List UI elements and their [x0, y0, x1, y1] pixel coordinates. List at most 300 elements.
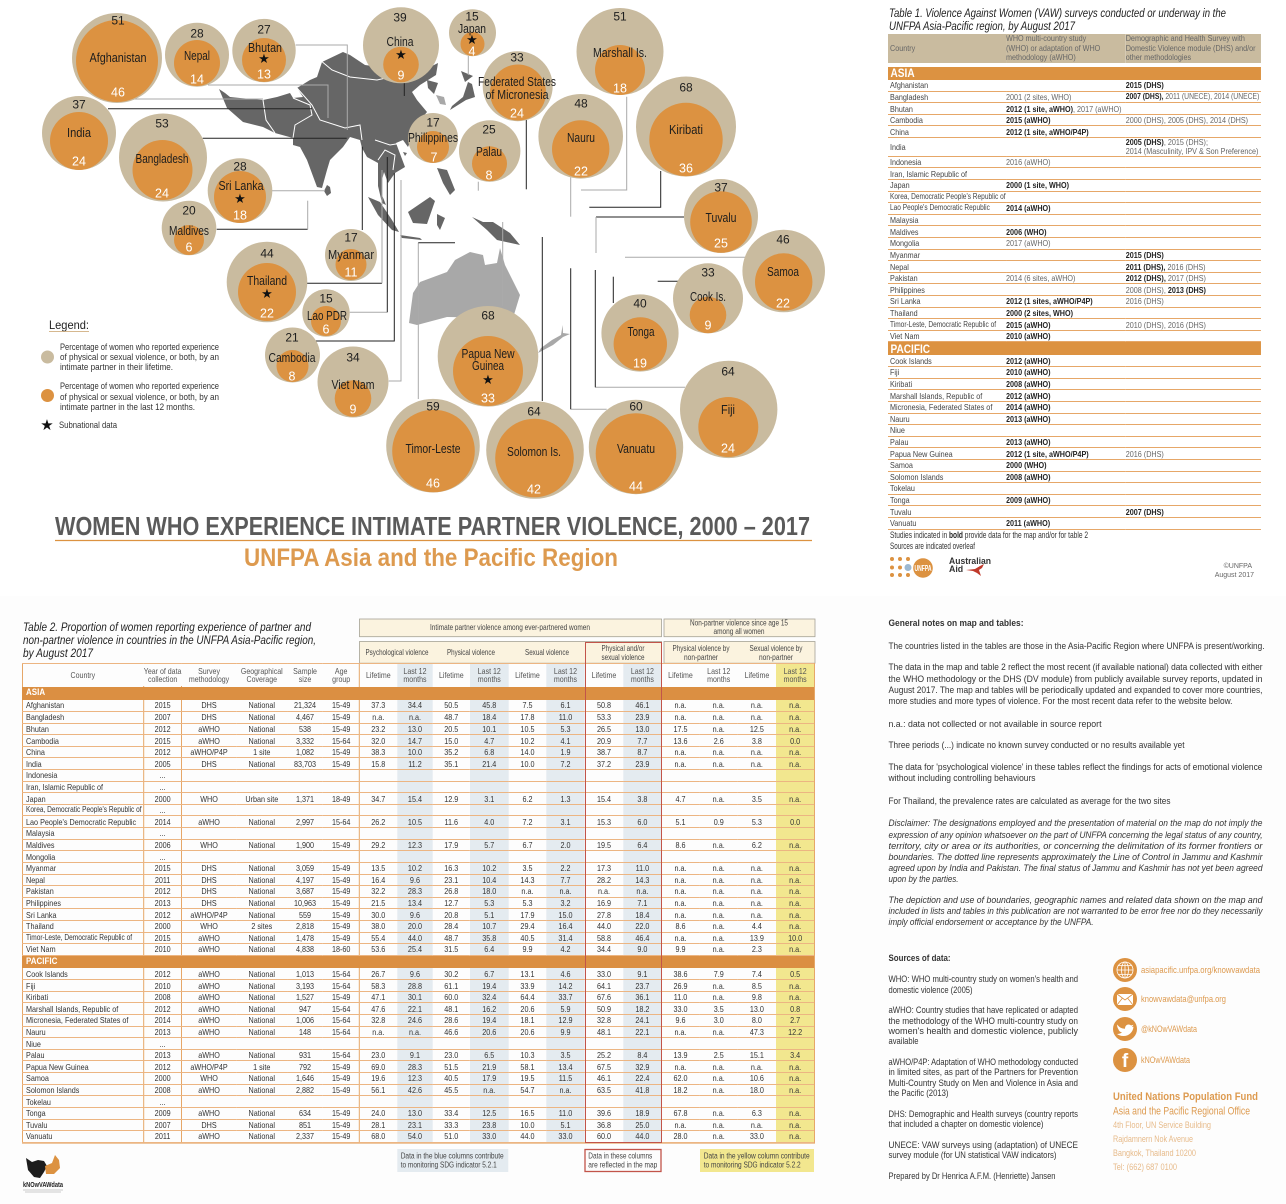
table 2 column headers: 0.5 [790, 969, 800, 979]
table 2 column headers: n.a. [372, 712, 384, 722]
sources of data: DHS: Demographic and Health surveys (country reports [888, 1109, 1078, 1119]
table 2 column headers: 5.1 [560, 1120, 570, 1130]
table 2 header: group boxes: Sexual violence [525, 647, 569, 657]
table 2 column headers: 47.6 [371, 1004, 385, 1014]
table 2 column headers: 13.9 [750, 933, 764, 943]
table 2 column headers: 11.0 [559, 712, 572, 722]
table 2 column headers: 22.1 [635, 1027, 649, 1037]
table 1 header: 2012 (aWHO) [1006, 391, 1051, 401]
table 1 header: 2006 (WHO) [1006, 227, 1047, 237]
table 2 column headers: 7.7 [560, 875, 570, 885]
table 2 column headers: 28.8 [408, 980, 422, 990]
table 1 header: 2007 (DHS), 2011 (UNECE), 2014 (UNECE) [1126, 92, 1259, 101]
table 2 column headers: 12.2 [788, 1027, 802, 1037]
logo: Australian Aid: Aid [949, 564, 963, 574]
bubble: Kiribati [636, 76, 736, 176]
table 2 column headers: 10.0 [788, 933, 802, 943]
table 2 column headers: 32.4 [482, 992, 496, 1002]
table 2 column headers: Korea, Democratic People's Republic of [26, 805, 142, 814]
sources of data: aWHO/P4P: Adaptation of WHO methodology conducted [888, 1057, 1078, 1067]
contact: facebook [1113, 1048, 1191, 1072]
table 2 column headers: 58.1 [520, 1062, 534, 1072]
table 2 column headers: 3,193 [296, 980, 314, 990]
table 1 header: Maldives [890, 227, 919, 237]
table 2 column headers: DHS [201, 1120, 217, 1130]
table 2 column headers: 68.0 [371, 1131, 385, 1141]
table 2 column headers: 10.2 [408, 863, 422, 873]
table 2 column headers: n.a. [674, 759, 687, 769]
table 1 header: (WHO) or adaptation of WHO [1006, 42, 1100, 52]
table 1 header: 2011 (aWHO) [1006, 518, 1050, 528]
bubble: Papua New Guinea [438, 306, 538, 407]
table 2 column headers: 37.3 [371, 700, 385, 710]
table 2 column headers: 2012 [155, 1004, 171, 1014]
table 2 column headers: 26.7 [371, 969, 385, 979]
table 1 header: Sri Lanka [890, 296, 921, 306]
table 1 header: Cook Islands [890, 356, 932, 366]
table 1 header: 2012 (aWHO) [1006, 356, 1051, 366]
table 2 column headers: 15-49 [332, 898, 350, 908]
table 2 column headers: Last 12 [631, 666, 654, 676]
bubble: Timor-Leste: Timor-Leste [406, 441, 460, 456]
table 2 column headers: 4.2 [560, 944, 570, 954]
table 2 header: group boxes: Psychological violence [366, 647, 429, 657]
table 2 column headers: ... [160, 828, 166, 838]
table 2 column headers: 50.5 [444, 700, 458, 710]
table 2 column headers: aWHO [198, 1131, 220, 1141]
table 2 column headers: 13.0 [635, 724, 649, 734]
table 2 column headers: 9.9 [675, 944, 686, 954]
table 2 column headers: Urban site [245, 794, 278, 804]
table 2 column headers: Iran, Islamic Republic of [26, 782, 103, 792]
bubble: Samoa: Samoa [767, 264, 800, 279]
table 2 column headers: 46.1 [597, 1073, 611, 1083]
legend: Subnational data [59, 420, 118, 430]
table 2 column headers: aWHO/P4P [190, 910, 228, 920]
bubble: Samoa: 46 [776, 232, 790, 246]
bubble: Tonga [601, 294, 679, 372]
table 2 column headers: 18.2 [635, 1004, 649, 1014]
office address: Asia and the Pacific Regional Office [1113, 1106, 1250, 1118]
table 2 column headers: ... [160, 782, 166, 792]
sources of data: the Pacific (2013) [888, 1088, 948, 1098]
general notes: n.a.: data not collected or not available in source report [888, 719, 1102, 729]
table 2 column headers: 2008 [155, 1085, 171, 1095]
table 2 header: group boxes [360, 618, 815, 663]
table 2 column headers: ... [160, 1039, 166, 1049]
table 2 column headers: 64.1 [597, 980, 611, 990]
table 1 header: 2000 (WHO) [1006, 460, 1047, 470]
table 2 column headers: aWHO/P4P [190, 747, 228, 757]
table 1 header: 2008 (aWHO) [1006, 379, 1051, 389]
table 2 column headers: 6.3 [752, 1108, 762, 1118]
bubble: Palau [459, 120, 520, 182]
table 2 title: non-partner violence in countries in the UNFPA Asia-Pacific region, [23, 635, 316, 647]
table 2 column headers: National [249, 898, 275, 908]
table 2 title: Table 2. Proportion of women reporting experience of partner and [23, 622, 312, 634]
table 2 column headers: 0.0 [790, 817, 800, 827]
table 2 column headers: 2,337 [296, 1131, 314, 1141]
table 2 column headers: n.a. [751, 759, 763, 769]
table 2 column headers: 14.0 [520, 747, 534, 757]
bubble: Papua New Guinea: Papua New [462, 346, 515, 361]
table 2 column headers: 792 [299, 1062, 311, 1072]
table 1 header: 2017 (aWHO) [1006, 238, 1051, 248]
table 2 column headers: 32.9 [635, 1062, 649, 1072]
table 1 title: Table 1. Violence Against Women (VAW) surveys conducted or underway in the [889, 8, 1226, 20]
table 2 column headers: n.a. [713, 712, 725, 722]
legend: intimate partner in the last 12 months. [60, 402, 195, 412]
table 2 column headers: 3.5 [522, 863, 532, 873]
table 1 header [888, 34, 1261, 528]
table 2 column headers: National [249, 1015, 275, 1025]
table 2 column headers: 10.5 [520, 724, 534, 734]
table 2 column headers: 34.4 [408, 700, 422, 710]
table 2 column headers: Myanmar [26, 863, 56, 873]
bubble: Cook Is.: 33 [701, 266, 715, 280]
disclaimer: agreed upon by India and Pakistan. The final status of Jammu and Kashmir has not yet been agreed [888, 863, 1263, 873]
table 2 column headers: Afghanistan [26, 700, 64, 710]
table 2 column headers: 6.4 [484, 944, 494, 954]
table 2 column headers: 2.7 [790, 1015, 800, 1025]
table 2 column headers: 4.7 [675, 794, 686, 804]
table 2 column headers: 2012 [155, 724, 171, 734]
table 2 column headers: Cook Islands [26, 969, 68, 979]
table 2 column headers: DHS [201, 898, 217, 908]
table 2 column headers: Survey [198, 666, 220, 676]
table 2 column headers: n.a. [751, 898, 763, 908]
bubble: Thailand: Thailand [247, 273, 287, 288]
table 2 column headers: months [631, 674, 654, 684]
table 2 column headers: 21.5 [371, 898, 385, 908]
table 2 column headers: 23.0 [444, 1050, 458, 1060]
table 2 column headers: Tuvalu [26, 1120, 47, 1130]
table 2 column headers: 33.0 [558, 1131, 572, 1141]
table 1 header: Papua New Guinea [890, 449, 953, 459]
table 2 column headers: months [478, 674, 501, 684]
table 2 column headers: WHO [200, 921, 218, 931]
table 2 title: by August 2017 [23, 648, 94, 660]
table 2 column headers: 8.6 [675, 840, 686, 850]
table 2 column headers: aWHO [198, 980, 220, 990]
table 2 column headers: 10.0 [520, 1120, 534, 1130]
table 2 column headers: 17.9 [444, 840, 458, 850]
table 2 column headers: 5.1 [675, 817, 686, 827]
bubble: Tuvalu: 25 [714, 236, 728, 250]
table 2 column headers: 2.2 [560, 863, 570, 873]
bubble: Bangladesh: 53 [155, 116, 169, 130]
table 2 column headers: 2012 [155, 886, 171, 896]
table 2 column headers: Last 12 [707, 666, 730, 676]
table 2 column headers: 10.5 [408, 817, 422, 827]
table 2 column headers: months [784, 674, 807, 684]
table 2 column headers: 14.7 [408, 736, 422, 746]
table 2 column headers: 31.5 [444, 944, 458, 954]
table 1 header: 2012 (1 site, aWHO/P4P) [1006, 127, 1089, 137]
table 2 column headers: 3.5 [560, 1050, 570, 1060]
table 2 column headers: n.a. [674, 898, 687, 908]
table 2 column headers: n.a. [713, 921, 725, 931]
table 2 column headers: 9.6 [410, 910, 420, 920]
table 2 column headers: 13.6 [673, 736, 688, 746]
table 2 column headers: 15-49 [332, 700, 350, 710]
table 2 column headers: 3.8 [752, 736, 762, 746]
table 2 column headers: aWHO [198, 969, 220, 979]
table 2 column headers: 38.7 [597, 747, 611, 757]
table 2 column headers: 6.5 [484, 1050, 494, 1060]
table 2 column headers: 9.1 [410, 1050, 420, 1060]
table 2 column headers: aWHO [198, 944, 220, 954]
bubble: Viet Nam: Viet Nam [332, 377, 374, 392]
table 2 column headers: 28.6 [444, 1015, 458, 1025]
table 2 column headers: 10.7 [482, 921, 496, 931]
table 2 column headers: n.a. [789, 875, 801, 885]
table 2 column headers: Lifetime [366, 670, 391, 680]
bubble: Lao PDR: 6 [323, 322, 330, 336]
table 2 column headers: 35.8 [482, 933, 496, 943]
table 2 column headers: n.a. [713, 1073, 725, 1083]
table 2 column headers: National [249, 817, 275, 827]
office address [1113, 1091, 1258, 1172]
table 2 column headers: National [249, 992, 275, 1002]
table 2 column headers: 9.9 [522, 944, 532, 954]
table 2 column headers: 559 [299, 910, 311, 920]
table 1 header: Niue [890, 425, 905, 435]
table 2 column headers: n.a. [751, 875, 763, 885]
copyright: August 2017 [1215, 572, 1254, 579]
legend: ★ [40, 416, 54, 434]
table 2 column headers: 15-49 [332, 910, 350, 920]
disclaimer [888, 818, 1264, 927]
table 2 column headers: 1,527 [296, 992, 314, 1002]
table 2 column headers: n.a. [789, 898, 801, 908]
sources of data: Multi-Country Study on Men and Violence in Asia and [888, 1078, 1078, 1088]
table 2 column headers: n.a. [789, 1120, 801, 1130]
table 1 title: UNFPA Asia-Pacific region, by August 2017 [889, 21, 1075, 33]
table 2 column headers: 48.7 [444, 933, 458, 943]
table 2 column headers: 4,838 [296, 944, 314, 954]
table 2 column headers: 2.5 [714, 1050, 724, 1060]
table 2 column headers: 62.0 [673, 1073, 688, 1083]
table 2 header: group boxes: Physical violence [447, 647, 495, 657]
legend: Percentage of women who reported experience [60, 381, 219, 391]
table 2 column headers: 48.1 [444, 1004, 458, 1014]
table 2 column headers: 7.7 [637, 736, 647, 746]
table 2 legend boxes: to monitoring SDG indicator 5.2.2 [704, 1160, 801, 1170]
table 2 column headers: 33.4 [444, 1108, 458, 1118]
table 2 column headers: National [249, 736, 275, 746]
table 2 column headers: 10.0 [408, 747, 422, 757]
table 1 header: 2012 (1 site, aWHO), 2017 (aWHO) [1006, 104, 1122, 114]
bubble: Bhutan: ★ [258, 52, 270, 67]
bubble: Afghanistan: 51 [111, 14, 125, 28]
table 2 column headers: 17.3 [597, 863, 611, 873]
bubble: Solomon Is.: Solomon Is. [507, 444, 561, 459]
table 2 column headers: 9.6 [410, 875, 420, 885]
bubble: China [363, 7, 439, 83]
table 1 header: Tonga [890, 495, 910, 505]
bubble: Federated States of Micronesia: Federated States [478, 74, 556, 89]
table 2 column headers: 3.4 [790, 1050, 800, 1060]
table 2 column headers: 2008 [155, 992, 171, 1002]
table 2 column headers: National [249, 910, 275, 920]
table 2 column headers: n.a. [674, 1027, 687, 1037]
bubble: China: 39 [393, 10, 407, 24]
bubble: Myanmar: 17 [344, 230, 358, 244]
table 2 column headers: 15.8 [371, 759, 385, 769]
table 2 column headers: 15-64 [332, 736, 350, 746]
table 2 column headers: 24.0 [371, 1108, 385, 1118]
general notes [888, 618, 1264, 806]
table 2 column headers: 54.7 [520, 1085, 534, 1095]
table 2 column headers: 15-64 [332, 969, 350, 979]
bubble: Myanmar: Myanmar [328, 247, 375, 262]
table 2 column headers: DHS [201, 886, 217, 896]
table 2 column headers: 24.1 [635, 1015, 649, 1025]
table 2 column headers: Timor-Leste, Democratic Republic of [26, 933, 132, 942]
table 2 column headers: 20.9 [597, 736, 611, 746]
table 2 column headers: Solomon Islands [26, 1085, 79, 1095]
table 2 column headers: 40.5 [444, 1073, 458, 1083]
table 2 column headers: n.a. [713, 747, 725, 757]
table 2 column headers: 2015 [155, 736, 171, 746]
table 2 column headers: 4.6 [560, 969, 570, 979]
title: WOMEN WHO EXPERIENCE INTIMATE PARTNER VIOLENCE, 2000 – 2017 [55, 511, 810, 541]
band: Pacific: PACIFIC [26, 956, 57, 967]
table 2 column headers: 3.5 [752, 794, 762, 804]
bubble: Myanmar: 11 [345, 266, 358, 280]
contact: twitter: @kNOwVAWdata [1141, 1024, 1198, 1035]
table 2 column headers: 10.2 [520, 736, 534, 746]
table 2 column headers: DHS [201, 759, 217, 769]
bubble: Nepal [165, 23, 229, 87]
sources of data: aWHO: Country studies that have replicated or adapted [888, 1005, 1078, 1015]
table 2 column headers: 12.3 [408, 840, 422, 850]
table 2 column headers: 45.8 [482, 700, 496, 710]
table 2 column headers: 28.3 [408, 886, 422, 896]
table 2 column headers: 2012 [155, 747, 171, 757]
table 2 column headers: 1,646 [296, 1073, 314, 1083]
table 2 column headers: 3.1 [560, 817, 570, 827]
table 1 header: Malaysia [890, 215, 919, 225]
table 2 column headers: 1,013 [296, 969, 314, 979]
table 2 column headers: 2006 [155, 840, 171, 850]
bubble: Kiribati: 36 [679, 162, 693, 176]
table 1 header: 2013 (aWHO) [1006, 437, 1051, 447]
bubble: Kiribati: 68 [679, 80, 693, 94]
table 1 header: other methodologies [1126, 52, 1191, 62]
table 2 column headers: n.a. [713, 1108, 725, 1118]
table 2 column headers: 35.2 [444, 747, 458, 757]
table 2 column headers: 2007 [155, 712, 171, 722]
bubble: Philippines: 7 [431, 150, 438, 164]
table 2 column headers: 23.1 [444, 875, 458, 885]
table 2 column headers: n.a. [372, 1027, 384, 1037]
table 2 column headers: 58.8 [597, 933, 611, 943]
table 2 column headers: National [249, 724, 275, 734]
table 2 column headers: 44.0 [597, 921, 611, 931]
bubble: Maldives: Maldives [169, 223, 209, 238]
table 2 column headers: Micronesia, Federated States of [26, 1015, 128, 1025]
bubble: Cambodia: 8 [289, 370, 296, 384]
table 2 column headers: Lifetime [668, 670, 693, 680]
table 2 column headers: n.a. [713, 794, 725, 804]
bubble: India [42, 96, 116, 170]
table 2 column headers: 2012 [155, 1062, 171, 1072]
table 2 column headers: 9.6 [410, 969, 420, 979]
table 1 footnotes [890, 530, 1088, 551]
table 2 column headers: 4.0 [484, 817, 494, 827]
table 2 column headers: Lao People's Democratic Republic [26, 817, 136, 827]
table 2 column headers: Papua New Guinea [26, 1062, 89, 1072]
table 2 column headers: 38.3 [371, 747, 385, 757]
table 2 column headers: n.a. [713, 1027, 725, 1037]
table 2 column headers: National [249, 759, 275, 769]
table 2 column headers: 11.5 [559, 1073, 572, 1083]
table 2 column headers: n.a. [789, 980, 801, 990]
table 2 column headers: 19.6 [371, 1073, 385, 1083]
sources of data [888, 953, 1078, 1181]
table 2 legend boxes: Data in the blue columns contribute [401, 1150, 504, 1160]
table 2 column headers: 20.0 [408, 921, 422, 931]
table 2 column headers: 32.8 [597, 1015, 611, 1025]
bubble: Viet Nam [318, 346, 388, 418]
table 1 header: Country [890, 42, 915, 52]
sources of data: in limited sites, as part of the Partners for Prevention [888, 1067, 1078, 1077]
table 2 column headers: aWHO/P4P [190, 1062, 228, 1072]
disclaimer: upon by the parties. [888, 874, 958, 884]
table 2 column headers: 6.4 [637, 840, 647, 850]
bubble: Maldives: 6 [186, 240, 193, 254]
legend: of physical or sexual violence, or both, by an [60, 392, 219, 402]
table 2 header: group boxes: among all women [714, 626, 765, 636]
table 2 column headers: 23.9 [635, 759, 649, 769]
contact: email [1113, 987, 1226, 1011]
bubble: Nauru: 22 [574, 164, 588, 178]
table 2 header: group boxes: Sexual violence by [750, 643, 803, 653]
bubble: Tonga: Tonga [628, 324, 655, 339]
table 2 column headers: 35.1 [444, 759, 458, 769]
table 2 column headers: India [26, 759, 42, 769]
table 2 column headers: 53.6 [371, 944, 385, 954]
sources of data: Sources of data: [888, 953, 950, 963]
bubble: Kiribati: Kiribati [669, 122, 703, 137]
table 2 column headers: 3,687 [296, 886, 314, 896]
disclaimer: territory, city or area or its authorities, or concerning the delimitation of its former frontiers or [888, 841, 1263, 851]
table 2 column headers: 54.0 [408, 1131, 422, 1141]
table 2 column headers: Kiribati [26, 992, 48, 1002]
table 2 column headers: 0.8 [790, 1004, 800, 1014]
table 2 legend boxes [397, 1149, 814, 1172]
table 1 header: 2001 (2 sites, WHO) [1006, 92, 1071, 102]
table 2 column headers: National [249, 1027, 275, 1037]
table 2 column headers: National [249, 886, 275, 896]
table 2 column headers: 44.0 [520, 1131, 534, 1141]
table 2 column headers: 1,478 [296, 933, 314, 943]
table 2 column headers: 48.1 [597, 1027, 611, 1037]
table 2 column headers: Viet Nam [26, 944, 56, 954]
table 2 column headers: n.a. [598, 886, 610, 896]
table 2 column headers: 2012 [155, 969, 171, 979]
table 2 column headers: 12.5 [750, 724, 764, 734]
table 2 column headers: 27.8 [597, 910, 611, 920]
bubble: India: 24 [72, 154, 86, 168]
table 1 header: Nepal [890, 262, 909, 272]
table 2 column headers: Geographical [241, 666, 283, 676]
bubble: Bhutan: Bhutan [248, 40, 282, 55]
bubble: Vanuatu [589, 400, 683, 494]
contact: website: asiapacific.unfpa.org/knowvawdata [1141, 965, 1261, 976]
